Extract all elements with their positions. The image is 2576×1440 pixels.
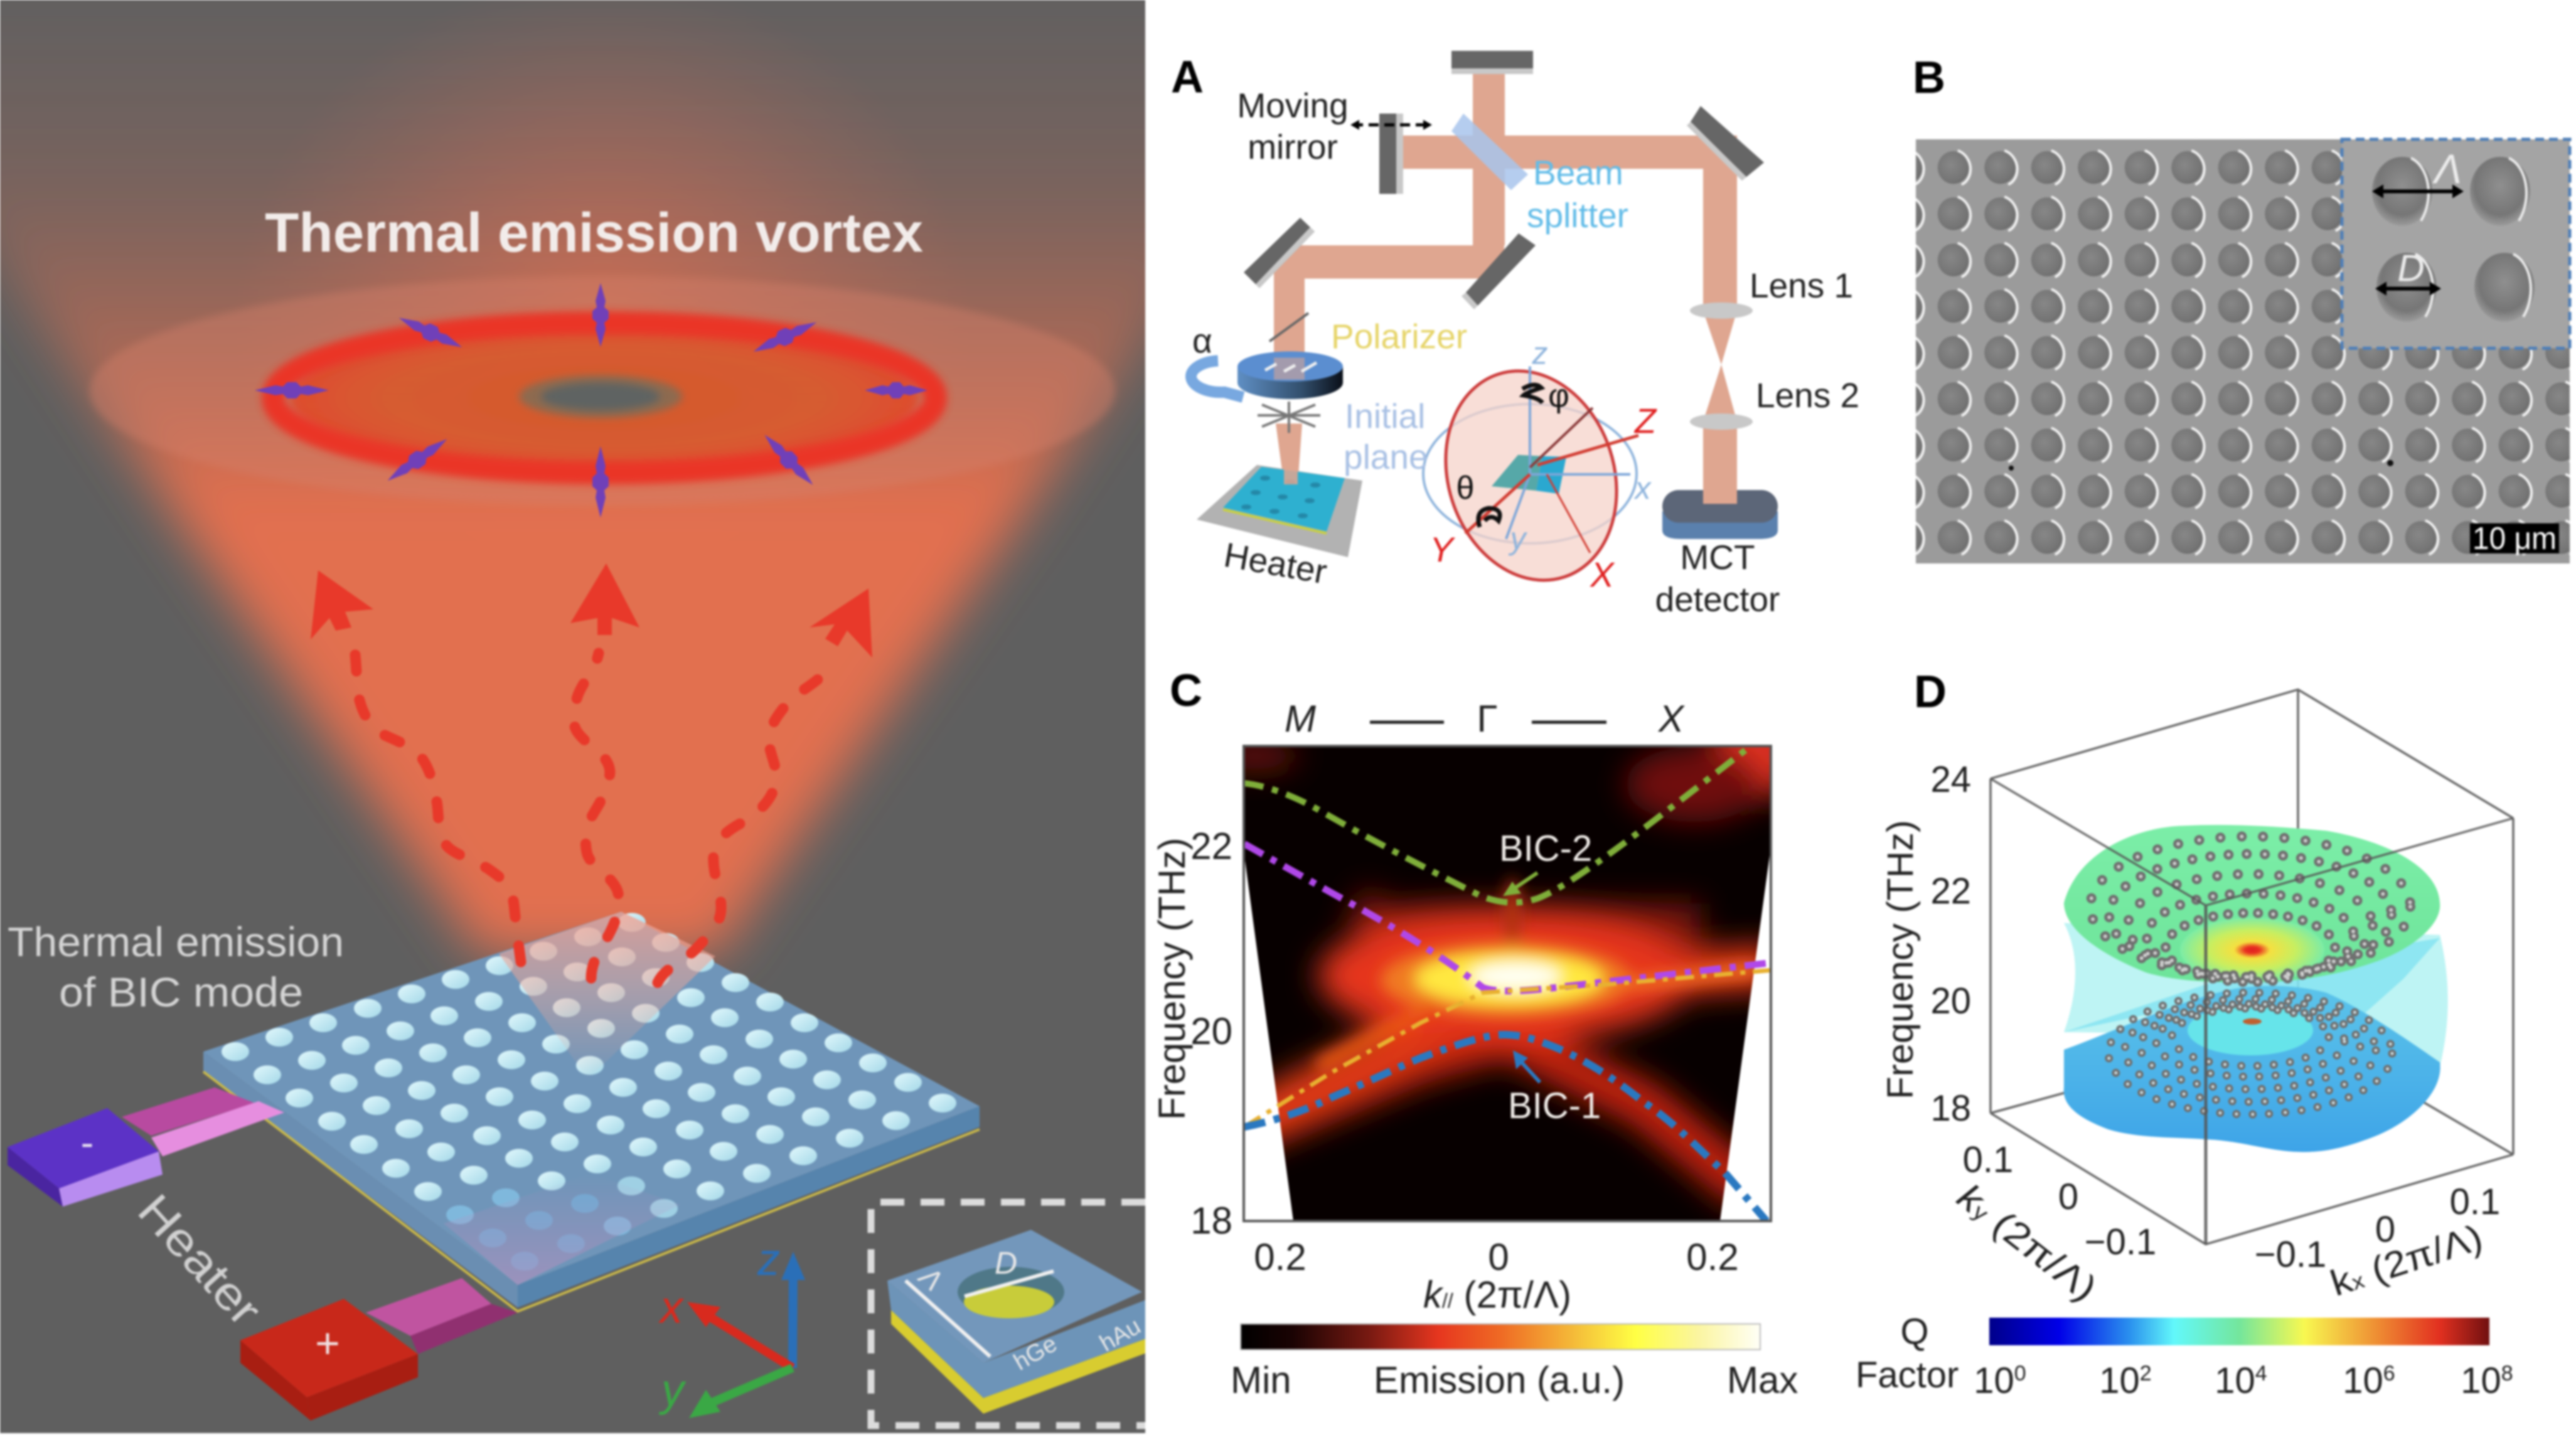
moving mirror arrow: [1350, 120, 1432, 130]
rotation sphere diagram: Z: [1633, 401, 1657, 440]
heatmap: [1243, 745, 1772, 1222]
frequency axis of D: 20: [1930, 981, 1971, 1021]
coordinate axes: y: [658, 1365, 687, 1416]
red dashed emission arrows: [355, 649, 831, 983]
frequency axis of D: 24: [1930, 759, 1971, 800]
colorbar: emission: [1231, 1324, 1798, 1401]
colorbar: Q factor: 10: [2099, 1360, 2140, 1401]
panel B: SEM image: [1913, 53, 2570, 563]
MCT detector: [1662, 490, 1778, 539]
kx axis: 0: [2375, 1209, 2395, 1250]
frequency axis of D: 22: [1930, 871, 1971, 912]
x axis of C: k// (2π/Λ): [1423, 1274, 1571, 1316]
emission cone: [0, 0, 1381, 955]
labels of setup: Polarizer: [1331, 317, 1467, 356]
SEM specks: [2009, 460, 2393, 471]
translucent crossing sheets: [2064, 923, 2448, 1067]
y axis of C: 18: [1190, 1200, 1232, 1242]
beam splitter: [1451, 114, 1528, 190]
electrode: negative: [8, 1087, 284, 1207]
panel A: optical setup: [1171, 51, 1859, 619]
inset: unit cell in dashed box: hAu: [1096, 1313, 1145, 1357]
labels of setup: Heater: [1221, 535, 1330, 591]
x axis of C: [1254, 1236, 1739, 1316]
colorbar: Q factor: 6: [2383, 1362, 2395, 1385]
labels of setup: Moving: [1237, 86, 1349, 125]
coordinate axes: x: [658, 1283, 685, 1333]
labels of setup: MCT: [1680, 538, 1755, 577]
panel letter D: D: [1914, 667, 1947, 717]
colorbar: Q factor: 2: [2140, 1362, 2152, 1385]
ky axis: −0.1: [2085, 1222, 2156, 1262]
scale bar: 10 μm: [2472, 521, 2557, 556]
lenses: [1690, 302, 1753, 430]
frequency axis of D: Frequency (THz): [1880, 820, 1921, 1099]
labels of setup: plane: [1344, 437, 1428, 476]
white wedges (no data): [1239, 818, 1774, 1221]
plot frame: [1244, 746, 1771, 1221]
substrate plate with hole array: [203, 912, 980, 1311]
top path labels: Γ: [1477, 698, 1498, 740]
upper band surface: [2064, 825, 2440, 983]
label: heater: Heater: [128, 1184, 272, 1335]
inset: unit cell in dashed box: Λ: [912, 1259, 949, 1297]
colorbar: emission: Min: [1231, 1359, 1291, 1401]
kx axis: [2255, 1181, 2500, 1304]
kx axis: 0.1: [2450, 1181, 2500, 1222]
electrode: positive: [240, 1278, 518, 1421]
ky axis: [1950, 1139, 2156, 1309]
labels of setup: detector: [1655, 580, 1780, 619]
colorbar: Q factor: 10: [2215, 1360, 2255, 1401]
kx axis: −0.1: [2255, 1234, 2326, 1275]
3D box back lines: [1991, 690, 2513, 1244]
labels of setup: Lens 2: [1756, 376, 1859, 415]
colorbar: Q factor: 10: [2343, 1360, 2383, 1401]
y axis of C: [1151, 825, 1232, 1242]
colorbar: Q factor: 4: [2255, 1362, 2267, 1385]
colorbar: Q factor: [1856, 1311, 2513, 1401]
coordinate axes: [658, 1235, 805, 1418]
panel: thermal emission vortex schematic: [0, 0, 1147, 1434]
rotation sphere diagram: θ: [1456, 470, 1474, 506]
x axis of C: 0: [1488, 1236, 1509, 1278]
x axis of C: 0.2: [1686, 1236, 1739, 1278]
colorbar: emission: Max: [1727, 1359, 1798, 1401]
kx axis: kx (2π/Λ): [2326, 1217, 2488, 1304]
rotation sphere diagram: z: [1531, 336, 1547, 371]
rotation sphere diagram: φ: [1548, 378, 1569, 414]
SEM dome array: [1916, 139, 2570, 563]
label: thermal emission of BIC mode: Thermal emission: [8, 919, 344, 965]
rotation sphere diagram: [1419, 336, 1657, 602]
coordinate axes: z: [757, 1235, 780, 1285]
ky axis: ky (2π/Λ): [1950, 1176, 2104, 1309]
panel C: emission map: [1151, 666, 1798, 1401]
inset: unit cell in dashed box: D: [995, 1245, 1017, 1281]
panel letter B: B: [1913, 53, 1945, 103]
electrode: positive: +: [315, 1320, 340, 1367]
annotations BIC: [1499, 828, 1601, 1126]
label: thermal emission of BIC mode: of BIC mode: [59, 969, 303, 1015]
lower band surface: [2064, 986, 2440, 1152]
frequency axis of D: [1880, 759, 1971, 1129]
x axis of C: 0.2: [1254, 1236, 1307, 1278]
colorbar: Q factor: 10: [2461, 1360, 2501, 1401]
rotation sphere diagram: X: [1589, 555, 1615, 594]
colorbar: Q factor: Q: [1900, 1311, 1929, 1352]
labels of setup: mirror: [1248, 127, 1338, 166]
colorbar: Q factor: 10: [1974, 1360, 2014, 1401]
dispersion: green band: [1243, 746, 1751, 902]
colorbar: emission: Emission (a.u.): [1374, 1359, 1625, 1401]
inset: unit cell in dashed box: [871, 1202, 1148, 1426]
annotations BIC: BIC-2: [1499, 828, 1592, 869]
annotations BIC: BIC-1: [1508, 1085, 1601, 1126]
labels of setup: α: [1192, 321, 1212, 360]
top path labels: X: [1657, 698, 1685, 740]
emission disc with vortex ring: [90, 276, 1115, 506]
colorbar: Q factor: 0: [2014, 1362, 2026, 1385]
colorbar: Q factor: 8: [2501, 1362, 2513, 1385]
labels of setup: Beam: [1533, 153, 1623, 192]
labels of setup: splitter: [1527, 196, 1628, 235]
3D box front lines: [1991, 779, 2513, 1244]
dispersion: purple band: [1244, 844, 1773, 991]
top path labels: [1285, 698, 1685, 740]
colorbar: Q factor: Factor: [1856, 1355, 1959, 1395]
rotation sphere diagram: x: [1634, 471, 1652, 506]
panel letter C: C: [1170, 666, 1202, 716]
labels of setup: Initial: [1345, 397, 1425, 435]
labels of setup: Lens 1: [1750, 266, 1853, 305]
dispersion: blue band: [1244, 1035, 1766, 1221]
inset: unit cell in dashed box: hGe: [1009, 1331, 1062, 1376]
title: Thermal emission vortex: [265, 201, 923, 264]
dispersion: orange band: [1244, 970, 1773, 1127]
ky axis: 0: [2058, 1176, 2078, 1217]
heater sample: [1197, 452, 1362, 557]
rotation sphere diagram: y: [1509, 521, 1527, 556]
panel D: Q factor 3D bands: [1856, 667, 2513, 1401]
polarization arrows: [255, 283, 927, 518]
panel letter A: A: [1171, 52, 1204, 102]
ky axis: 0.1: [1963, 1139, 2013, 1180]
mirrors: [1244, 51, 1764, 309]
polarizer: [1191, 313, 1343, 433]
y axis of C: Frequency (THz): [1151, 838, 1193, 1120]
labels of setup: [1192, 86, 1859, 619]
frequency axis of D: 18: [1930, 1088, 1971, 1129]
electrode: negative: -: [81, 1121, 94, 1165]
rotation sphere diagram: Y: [1430, 530, 1455, 569]
zoom inset: Λ: [2432, 146, 2462, 192]
arrowheads: [311, 563, 872, 658]
y axis of C: 22: [1190, 825, 1232, 867]
zoom inset: [2342, 139, 2570, 348]
y axis of C: 20: [1190, 1010, 1232, 1052]
zoom inset: D: [2397, 247, 2425, 289]
beam paths: [1274, 74, 1737, 503]
top path labels: M: [1285, 698, 1316, 740]
